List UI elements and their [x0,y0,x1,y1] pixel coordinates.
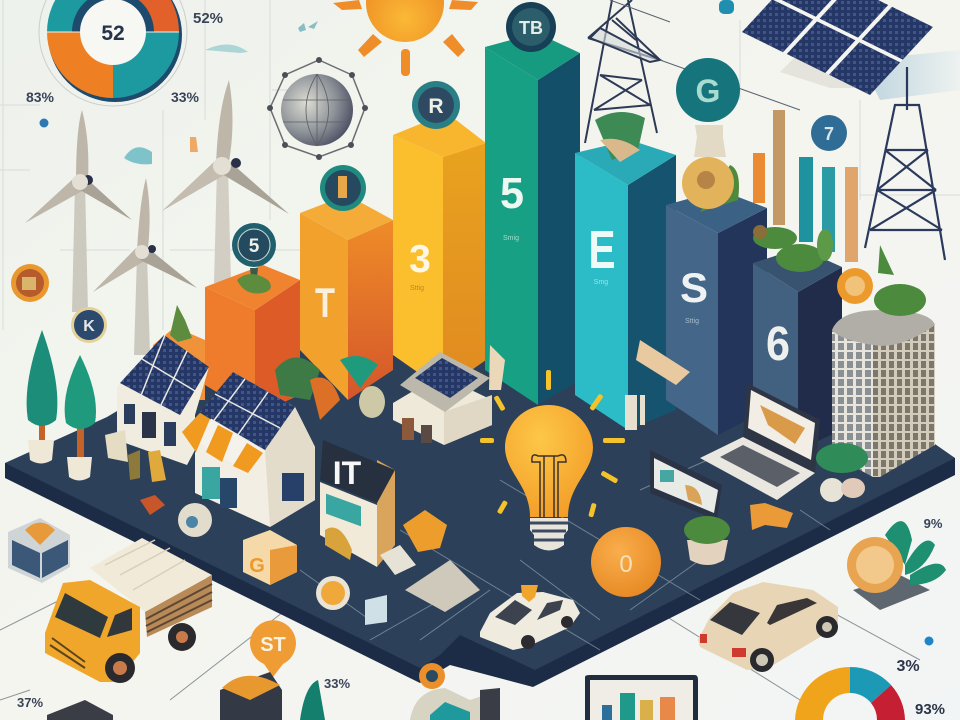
plants on bar 5 [595,112,645,162]
potted plant: front [684,516,730,565]
truck [45,538,212,683]
dark object bottom left [47,700,113,720]
badge: left orange [11,264,49,302]
bar 7: dark navy [753,248,842,450]
IT sign: IT [333,455,362,491]
label: donut percent right: 52% [193,10,223,27]
icon: light bulb [505,405,593,550]
bar 4 numeral: 5 [500,169,524,218]
clutter between bars [275,340,690,430]
wind turbine: lower [93,178,197,355]
tall building [832,310,935,477]
badge: orange coin [837,268,873,304]
label: 93%: 93% [915,701,945,718]
white plate and device [380,545,416,575]
crate: left [8,518,70,583]
building: centre with solar roof [393,352,492,445]
plants on bar 7 [753,225,833,272]
laptop [700,383,820,500]
bar 2: orange [300,195,393,400]
badge: K [71,307,107,343]
wind turbine: centre [162,80,289,283]
badge: small blue: 7 [824,124,834,144]
small coin on floor [316,576,350,610]
badge: 5: 5 [249,236,260,257]
tree: right [65,355,96,480]
icon: orange ball: 0 [619,551,633,578]
badge: big teal G on stand [676,58,740,212]
white car [480,585,580,650]
bar 6 caption: Sttig [685,318,699,325]
basket item bottom [220,672,325,720]
bubble: ST [250,620,296,677]
monitor on floor [650,450,722,520]
group bottom middle: ring and devices [410,663,500,720]
mini bar chart: background [753,110,858,262]
bar 4 caption: Smig [503,235,519,242]
label: percent left: 83% [26,89,55,105]
label: 37%: 37% [17,695,43,710]
bar 2 letter: T [315,279,335,326]
monitor bottom [585,675,698,720]
pylon: right [865,67,945,260]
icon: sun [333,0,478,76]
blue dot [924,636,934,646]
label: 3%: 3% [896,658,920,675]
wind turbine: left [25,110,132,312]
bar 6 letter: S [680,264,708,311]
donut chart: bottom right [795,667,905,720]
badge: R [412,81,460,129]
label: percent middle: 33% [171,89,200,105]
bar 5 letter: E [588,220,616,280]
dot marker [40,118,48,128]
bar 7 numeral: 6 [766,318,790,371]
cube G: G [249,555,265,577]
platform: dark floor [5,350,955,687]
badge: TB [506,2,556,52]
dot top [719,0,734,14]
badge: R: R [428,95,444,118]
small chart tile [365,595,387,625]
potted plant: right [816,443,868,502]
awning [182,413,265,473]
yellow dashes around bulb [480,370,625,518]
building: IT block [320,440,395,567]
bar 4: green [485,33,580,405]
icon: orange ball [591,527,661,597]
badge: small blue [811,115,847,151]
house: left with solar roof [117,335,209,465]
round object on floor [178,503,212,537]
cream car [698,582,838,672]
tree: left [27,330,57,464]
bar 6: slate [666,190,767,435]
badge: 5 [232,223,276,285]
pylon: centre [585,0,800,143]
label: 9%: 9% [924,516,943,531]
donut centre value: 52 [101,22,125,45]
bar 3 numeral: 3 [409,238,431,281]
solar panel: top right [742,0,960,100]
cube G [243,530,297,585]
coin and leaves on bar 6 [700,165,739,212]
label: 33%: 33% [324,676,350,691]
loose items on floor [105,430,166,515]
badge: TB: TB [519,18,543,38]
small orange block behind house [153,305,205,400]
house: shop with awning [182,372,315,527]
faint teal smudges [124,21,318,164]
plant on bar 1 [237,274,271,293]
bar 3 caption: Sttig [410,285,424,292]
donut chart: top left [39,0,187,106]
coin with leaves [847,521,946,610]
bar 3: yellow [393,113,486,390]
bar 1: orange-red [205,265,300,415]
bar 5 caption: Smg [594,279,608,286]
badge: big teal G on stand: G [696,73,720,109]
bar 5: cyan [575,140,676,430]
icon: globe with network [267,57,368,160]
orange box on floor [403,510,447,552]
bubble: ST: ST [260,634,286,656]
badge: K: K [83,318,95,335]
orange token on floor [750,503,793,530]
badge: bar 2 [320,165,366,211]
plants on tall building [874,245,926,316]
